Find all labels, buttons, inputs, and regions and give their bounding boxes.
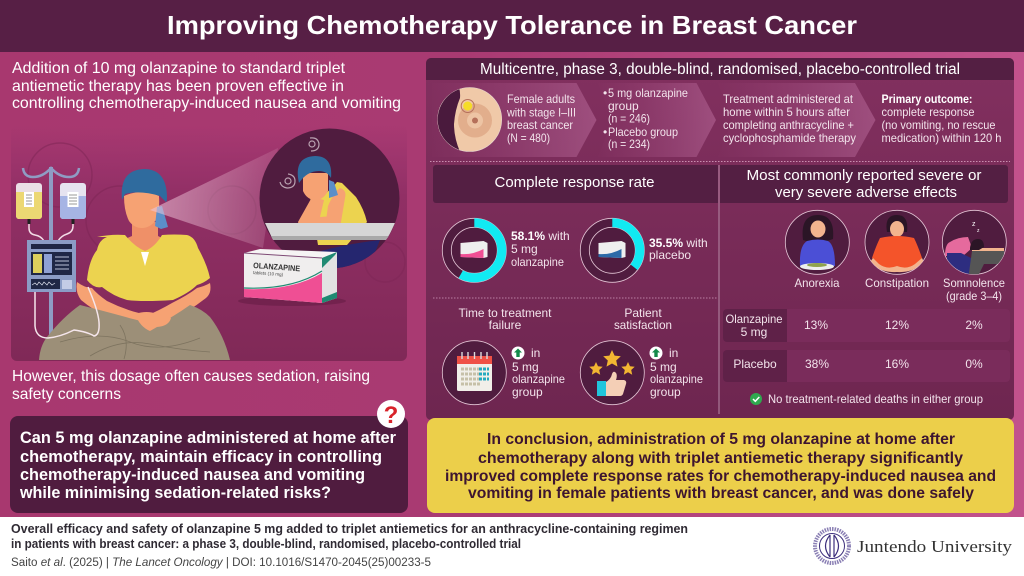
chart: donut olanzapine 58.1%: 5 mg [511,242,538,256]
table row: placebo: 0% [965,357,983,371]
note: no deaths: No treatment-related deaths in either group [768,392,983,406]
text: patient satisfaction: Patient [624,306,662,320]
flow: groups: • [603,125,607,139]
labels: adverse effects: Constipation [865,276,929,290]
logo: Juntendo University [815,529,1013,563]
table row: placebo: Placebo [733,357,777,371]
flow: primary outcome: Primary outcome: [882,92,972,106]
flow: groups: group [608,99,639,113]
panel: patient illustration [11,125,407,361]
icon: thumbs-up with stars [580,341,644,405]
icon: calendar [442,341,506,405]
text: background on olanzapine [12,60,401,112]
flow: primary outcome: complete response [882,105,975,119]
table row: placebo [723,350,1010,382]
text: increase in olanzapine group (time to failure): group [512,385,543,399]
shirt [87,234,210,301]
panel: conclusion: improved complete response rates for chemotherapy-induced nausea and [445,468,996,485]
panel: conclusion: vomiting in female patients with breast cancer, and was done safely [468,485,974,502]
illustration: seated patient [39,169,230,360]
flow: groups [598,83,716,157]
text: increase in olanzapine group (time to failure): 5 mg [512,360,539,374]
blanket [39,305,230,360]
text: sedation concern [12,368,370,403]
panel: research question [10,416,408,513]
flow: population: with stage I–III [506,106,576,120]
flow: treatment [718,83,876,157]
icon: somnolence: z [977,228,980,234]
illustration: olanzapine box: OLANZAPINE [253,261,301,273]
table row: olanzapine 5 mg: 2% [965,318,983,332]
text: time to treatment failure: failure [489,318,522,332]
heading: adverse effects: Most commonly reported severe or [746,167,982,184]
chart: donut olanzapine 58.1%: 58.1% with [511,229,570,243]
panel: trial details [426,58,1014,420]
icon: breast with tumour [437,87,502,152]
panel: conclusion: chemotherapy along with triplet antiemetic therapy significantly [478,450,963,467]
arms [76,282,157,332]
title banner [0,0,1024,52]
icon: constipation [865,210,929,274]
text: background on olanzapine: Addition of 10 mg olanzapine to standard triplet [12,60,346,77]
text: increase in olanzapine group (satisfaction): 5 mg [650,360,677,374]
text: background on olanzapine: antiemetic therapy has been proven effective in [12,78,344,95]
heading: adverse effects: very severe adverse effects [775,184,957,201]
text: increase in olanzapine group (satisfaction): in [669,346,678,360]
text: increase in olanzapine group (time to failure) [512,346,565,399]
icon: somnolence: z [972,221,976,228]
icon: IV pole with bags and pump [16,167,86,341]
footer: citation: Saito et al. (2025) | The Lancet Oncology | DOI: 10.1016/S1470-2045(25)00233-5 [11,557,431,569]
text: increase in olanzapine group (satisfaction) [650,346,703,399]
chart: donut placebo 35.5%: 35.5% with [649,236,708,250]
icon: question mark: ? [384,402,398,429]
neck [125,222,164,253]
flow: groups: Placebo group [608,125,678,139]
panel: research question: while minimising sedation-related risks? [19,484,331,502]
chart: donut placebo 35.5%: placebo [649,248,691,262]
table row: olanzapine 5 mg: Olanzapine [726,312,783,326]
flow: groups: 5 mg olanzapine [608,86,688,100]
table row: olanzapine 5 mg: 5 mg [741,325,767,339]
heading: complete response rate [433,165,718,203]
head [124,192,159,228]
chart: donut olanzapine 58.1%: olanzapine [511,255,564,269]
text: increase in olanzapine group (time to failure): in [531,346,540,360]
flow: groups: (n = 246) [608,112,650,126]
labels: adverse effects: Somnolence [943,276,1005,290]
heading: complete response rate: Complete response rate [494,174,654,191]
illustration: olanzapine box: tablets (10 mg) [253,270,284,277]
icon: projection beam [150,148,278,248]
flow: primary outcome [882,92,1002,145]
text: patient satisfaction: satisfaction [614,318,672,332]
text: sedation concern: safety concerns [12,386,121,403]
hands [135,312,171,331]
flow: treatment: Treatment administered at [723,92,854,106]
flow: groups: (n = 234) [608,137,650,151]
footer: citation: in patients with breast cancer: a phase 3, double-blind, randomised, placebo-controlled trial [11,537,521,551]
flow: primary outcome: (no vomiting, no rescue [882,118,996,132]
table row: olanzapine 5 mg [723,309,1010,342]
heading: trial design: Multicentre, phase 3, double-blind, randomised, placebo-controlled trial [480,61,960,78]
footer: citation [0,517,1024,576]
text: time to treatment failure: Time to treatment [458,306,552,320]
flow: treatment: home within 5 hours after [723,105,850,119]
chart: donut placebo 35.5% [580,218,708,282]
text: time to treatment failure [458,306,552,332]
text: increase in olanzapine group (satisfaction): group [650,385,681,399]
heading: trial design [426,58,1014,80]
labels: adverse effects: (grade 3–4) [946,289,1002,303]
flow: population: (N = 480) [507,131,550,145]
panel: conclusion [427,418,1014,513]
table row: placebo: 16% [885,357,909,371]
chart: donut olanzapine 58.1% [442,218,570,282]
title banner: Improving Chemotherapy Tolerance in Breast Cancer [167,10,857,40]
flow: treatment: cyclophosphamide therapy [723,131,856,145]
flow: treatment: completing anthracycline + [723,118,854,132]
icon: IV line [35,287,99,338]
panel: conclusion: In conclusion, administration of 5 mg olanzapine at home after [487,431,955,448]
panel: research question: chemotherapy-induced nausea and vomiting [20,466,365,484]
icon: question mark [377,400,405,429]
table row: olanzapine 5 mg: 12% [885,318,909,332]
panel: research question: chemotherapy, maintain efficacy in controlling [20,448,382,466]
text: sedation concern: However, this dosage often causes sedation, raising [12,368,370,385]
text: increase in olanzapine group (satisfaction): olanzapine [650,372,703,386]
flow: population: Female adults [507,92,575,106]
table row: olanzapine 5 mg: 13% [804,318,828,332]
flow: groups: • [603,86,607,100]
labels: adverse effects [794,276,1005,303]
flow: population [432,80,596,157]
labels: adverse effects: Anorexia [794,276,840,290]
flow: primary outcome: medication) within 120 h [882,131,1002,145]
footer: citation: Overall efficacy and safety of olanzapine 5 mg added to triplet antiemetics for an anthracycline-containing regimen [11,522,688,536]
heading: adverse effects [720,165,1008,203]
logo: Juntendo University: Juntendo University [857,537,1013,556]
illustration: olanzapine box [238,249,346,306]
text: increase in olanzapine group (time to failure): olanzapine [512,372,565,386]
icon: anorexia [785,210,849,274]
illustration: drowsy patient vignette [260,128,400,271]
icon: somnolence [942,210,1006,280]
text: patient satisfaction [614,306,672,332]
panel: research question: Can 5 mg olanzapine administered at home after [20,429,397,447]
table row: placebo: 38% [805,357,829,371]
flow: population: breast cancer [507,118,573,132]
text: background on olanzapine: controlling chemotherapy-induced nausea and vomiting [12,95,401,112]
